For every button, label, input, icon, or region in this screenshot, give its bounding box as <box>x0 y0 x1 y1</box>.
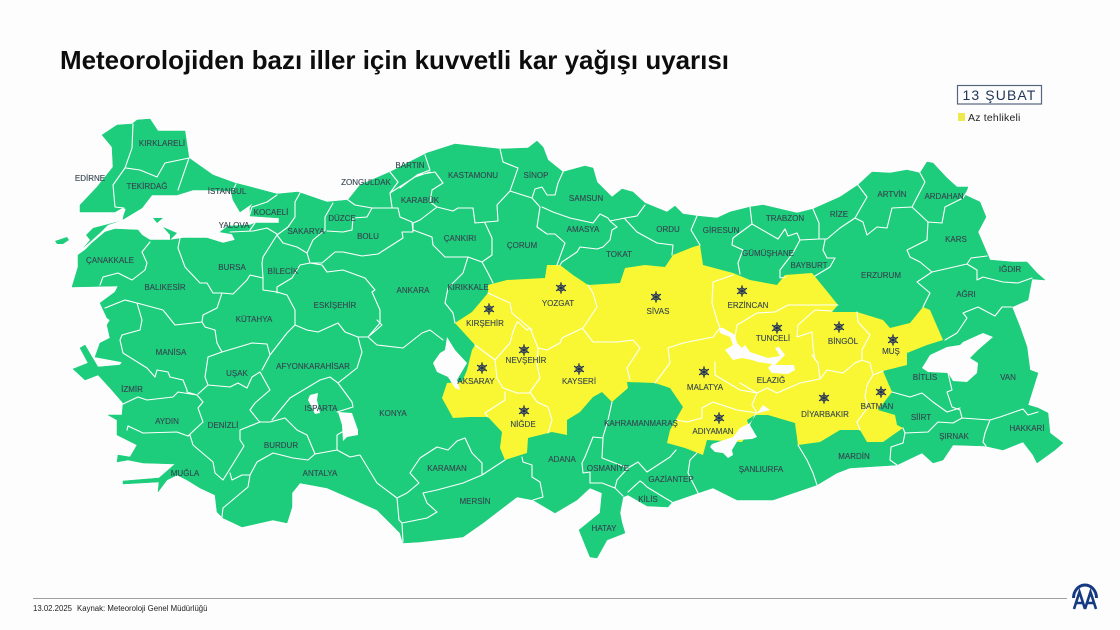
province names: IĞDIR <box>999 265 1021 274</box>
province names: NİĞDE <box>510 420 536 429</box>
province names: GAZİANTEP <box>648 475 694 484</box>
province names: KOCAELİ <box>254 208 288 217</box>
province names: KIRŞEHİR <box>466 319 504 328</box>
province names: AĞRI <box>956 290 976 299</box>
province names: ADANA <box>548 455 576 464</box>
province names: MUĞLA <box>171 469 200 478</box>
islands and Gallipoli <box>55 218 177 248</box>
lakes <box>308 328 993 458</box>
province names: ANTALYA <box>303 469 338 478</box>
province names: KÜTAHYA <box>236 315 273 324</box>
province names: MERSİN <box>459 497 491 506</box>
province names: AMASYA <box>567 225 600 234</box>
province names: AYDIN <box>155 417 179 426</box>
province names: HAKKARİ <box>1009 424 1045 433</box>
yellow province borders <box>475 275 883 433</box>
province names: ERZURUM <box>861 271 901 280</box>
province names: BİLECİK <box>268 267 299 276</box>
green provinces base <box>72 119 1063 558</box>
province names: BALIKESİR <box>144 283 186 292</box>
province names: TEKİRDAĞ <box>127 182 167 191</box>
province names: HATAY <box>592 524 617 533</box>
province names: MANİSA <box>156 348 187 357</box>
province names: ÇORUM <box>507 241 537 250</box>
province names: EDİRNE <box>75 174 105 183</box>
title: Meteorolojiden bazı iller için kuvvetli kar yağışı uyarısı <box>60 45 729 75</box>
province names: KONYA <box>379 409 407 418</box>
province names: BURSA <box>218 263 246 272</box>
province names: KASTAMONU <box>448 171 498 180</box>
province names: NEVŞEHİR <box>506 356 547 365</box>
province names: SİİRT <box>911 413 931 422</box>
date box: 13 ŞUBAT <box>963 87 1036 103</box>
province names: BATMAN <box>861 402 894 411</box>
province names: AKSARAY <box>457 377 495 386</box>
province names: BOLU <box>357 232 379 241</box>
province names: ARDAHAN <box>924 192 964 201</box>
footer source: 13.02.2025 Kaynak: Meteoroloji Genel Müdürlüğü <box>33 604 208 613</box>
province names: ŞANLIURFA <box>739 465 784 474</box>
province names: KARAMAN <box>427 464 467 473</box>
province names: ANKARA <box>397 286 430 295</box>
province names: İSTANBUL <box>208 187 247 196</box>
footer rule <box>33 598 1067 600</box>
province names: ADIYAMAN <box>692 427 734 436</box>
province names: KİLİS <box>638 495 658 504</box>
province names: MARDİN <box>838 452 870 461</box>
province names: KIRKLARELİ <box>139 139 185 148</box>
province names: ESKİŞEHİR <box>314 301 357 310</box>
province names: KAYSERİ <box>562 377 596 386</box>
province names: GİRESUN <box>703 226 739 235</box>
province names: SİVAS <box>647 307 669 316</box>
legend: Az tehlikeli <box>968 112 1021 124</box>
province names: DENİZLİ <box>208 421 238 430</box>
province names: MALATYA <box>687 383 724 392</box>
province names: ÇANAKKALE <box>86 256 134 265</box>
province names: DİYARBAKIR <box>801 410 849 419</box>
province names: İZMİR <box>121 385 143 394</box>
province names: SİNOP <box>524 171 548 180</box>
province names: GÜMÜŞHANE <box>742 249 794 258</box>
map of Turkey <box>55 119 1063 558</box>
province names: BAYBURT <box>790 261 828 270</box>
province names: KARABÜK <box>401 196 440 205</box>
province names: KARS <box>945 235 967 244</box>
province names: ERZİNCAN <box>728 301 769 310</box>
province names: SAMSUN <box>569 194 603 203</box>
province names: ŞIRNAK <box>939 432 970 441</box>
province names: OSMANİYE <box>587 464 629 473</box>
province names: ZONGULDAK <box>341 178 392 187</box>
province names: KIRIKKALE <box>447 283 489 292</box>
province names: MUŞ <box>882 347 900 356</box>
province names: RİZE <box>830 210 848 219</box>
province borders <box>100 124 1038 542</box>
province names: SAKARYA <box>287 227 325 236</box>
province names: YOZGAT <box>542 299 574 308</box>
province names: VAN <box>1000 373 1016 382</box>
province names: BARTIN <box>395 161 425 170</box>
yellow warning area <box>442 245 943 460</box>
province names <box>75 139 1045 533</box>
province names: BİNGÖL <box>828 337 859 346</box>
province names: ORDU <box>656 225 680 234</box>
province names: KAHRAMANMARAŞ <box>604 419 678 428</box>
province names: ÇANKIRI <box>444 234 476 243</box>
icon: AA logo <box>1074 585 1096 609</box>
province names: ARTVİN <box>877 190 907 199</box>
province names: BİTLİS <box>913 373 937 382</box>
province names: DÜZCE <box>328 214 356 223</box>
province names: BURDUR <box>264 441 298 450</box>
province names: YALOVA <box>219 221 250 230</box>
province names: ISPARTA <box>305 404 338 413</box>
province names: TRABZON <box>766 214 804 223</box>
province names: ELAZIĞ <box>757 376 785 385</box>
province names: TOKAT <box>606 250 632 259</box>
province names: UŞAK <box>226 369 249 378</box>
province names: AFYONKARAHİSAR <box>276 362 350 371</box>
snow icons <box>477 282 898 424</box>
province names: TUNCELİ <box>756 334 790 343</box>
